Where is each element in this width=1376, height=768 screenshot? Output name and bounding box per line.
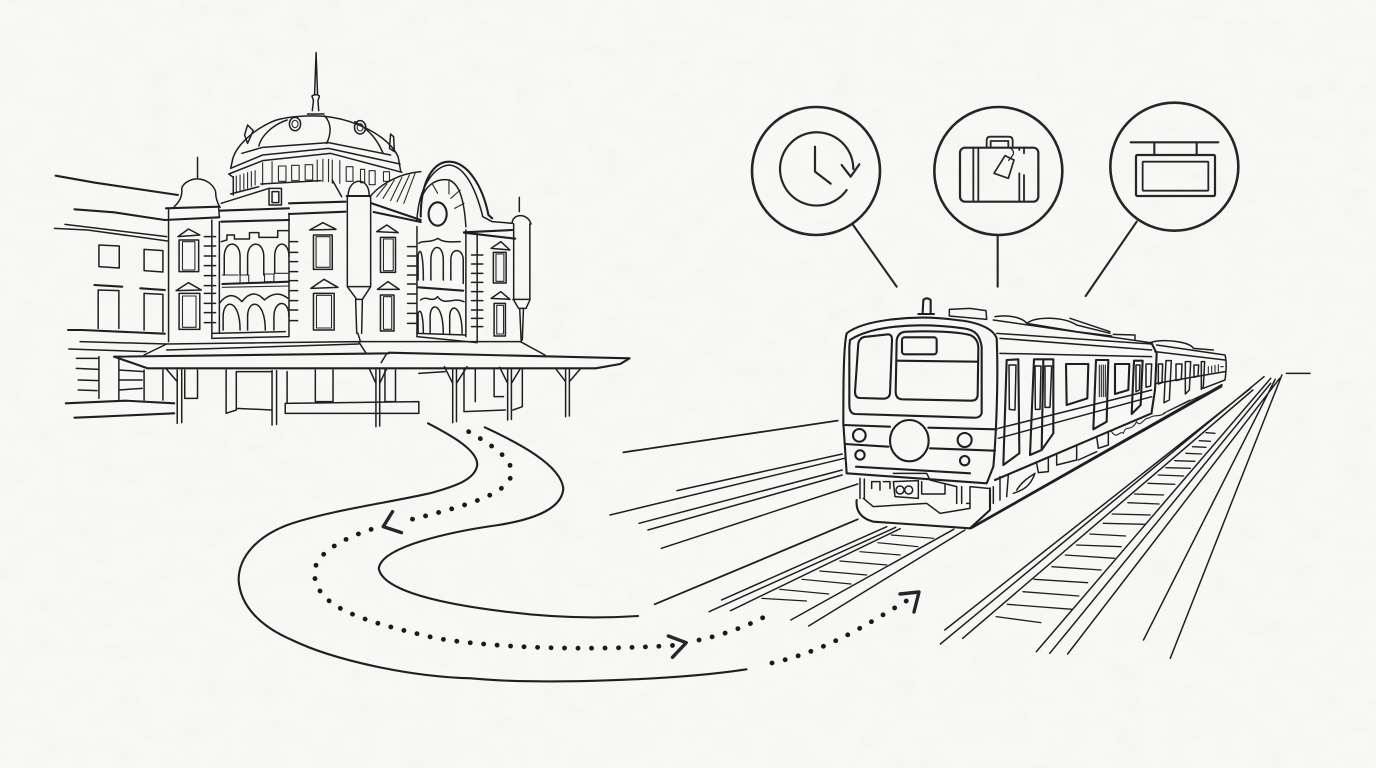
commuter train xyxy=(843,298,1226,528)
arrowhead: toward train xyxy=(900,592,919,612)
second car xyxy=(1150,341,1226,412)
station building xyxy=(55,53,630,427)
left background lines xyxy=(610,421,858,604)
dotted route: toward tracks xyxy=(699,615,768,640)
callout: station sign xyxy=(1086,103,1238,296)
dome and spire xyxy=(229,53,402,205)
first car side xyxy=(993,320,1152,480)
tower column xyxy=(347,181,371,342)
train front xyxy=(843,318,997,483)
callout icons xyxy=(752,103,1238,296)
left pavilion xyxy=(165,157,289,342)
main track under train xyxy=(709,527,965,626)
lights xyxy=(853,429,972,465)
arched pavilion xyxy=(370,162,515,343)
road outer edge xyxy=(239,423,747,681)
left wing xyxy=(55,176,178,418)
arrowhead: first bend xyxy=(383,512,401,533)
callout: suitcase xyxy=(934,107,1062,287)
arrowhead: second bend xyxy=(668,636,686,657)
winding road with dotted route xyxy=(239,423,768,681)
callout: clock xyxy=(752,107,897,287)
road inner edge xyxy=(379,427,638,617)
dotted route to train xyxy=(772,592,919,663)
arched bay left xyxy=(219,231,298,330)
central section xyxy=(219,188,345,330)
platform canopy xyxy=(114,342,630,427)
dotted route: station to first bend xyxy=(402,432,512,522)
undercarriage xyxy=(970,385,1222,528)
dotted route: second bend xyxy=(314,529,674,648)
right track xyxy=(940,373,1310,658)
bumper and coupler xyxy=(857,473,990,528)
right wing and column xyxy=(491,197,531,342)
railway tracks xyxy=(610,373,1310,658)
roof equipment xyxy=(918,298,1135,339)
headlamp xyxy=(890,420,929,461)
